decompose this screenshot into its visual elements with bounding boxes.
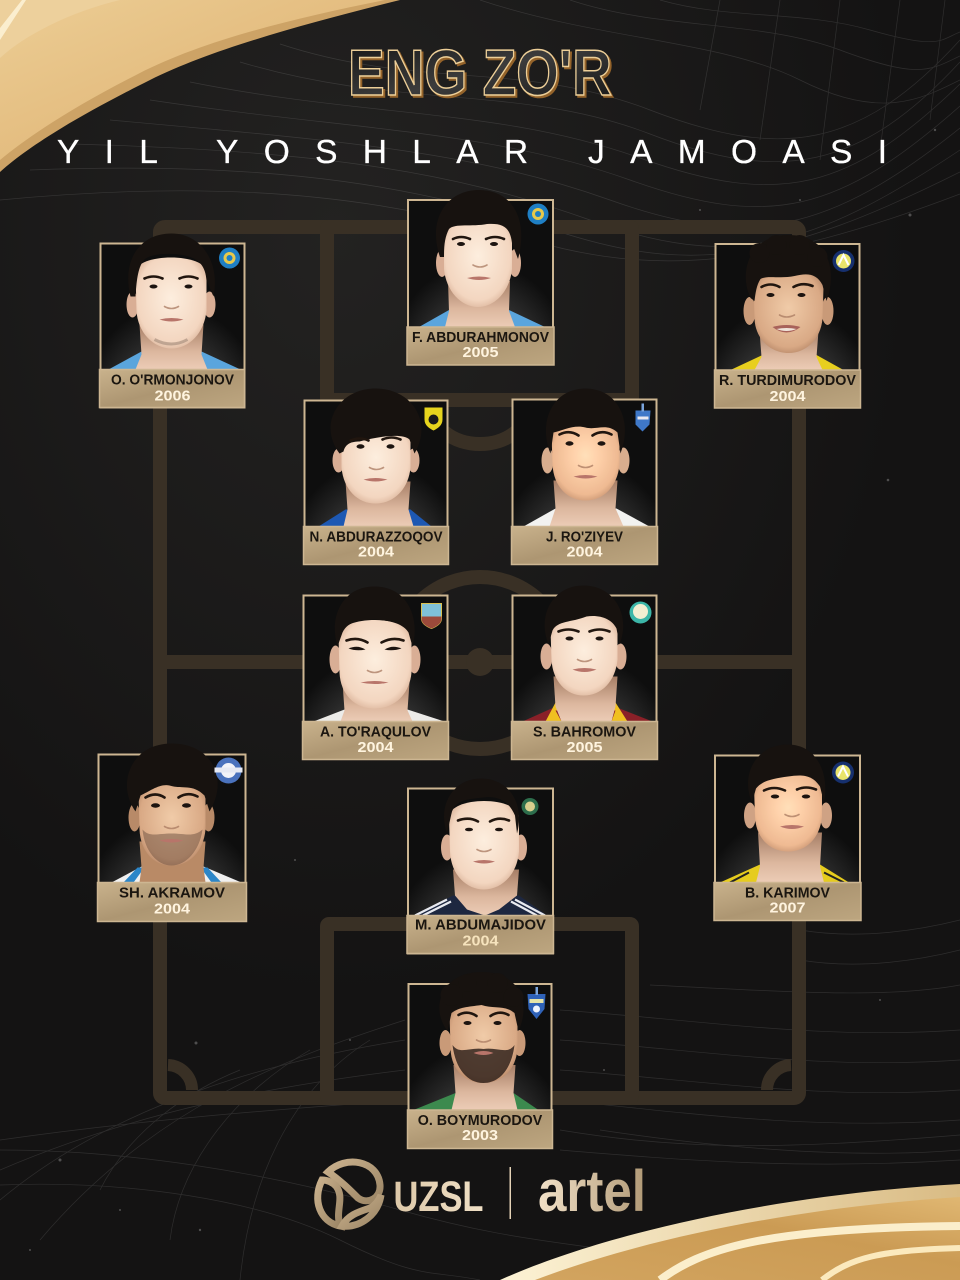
name and birth year: N. ABDURAZZOQOV [310,530,443,546]
club badge [522,798,538,815]
player card: SH. AKRAMOV [98,744,246,922]
player card: N. ABDURAZZOQOV [304,388,448,564]
name and birth year: 2004 [462,934,498,950]
club badge [219,248,240,268]
subtitle: YIL YOSHLAR JAMOASI: YIL YOSHLAR JAMOASI [57,134,887,171]
club badge [424,408,442,430]
icon: UZSL ball [318,1162,381,1226]
name and birth year: J. RO'ZIYEV [546,530,623,546]
name and birth year: F. ABDURAHMONOV [412,330,549,346]
name and birth year: 2004 [566,544,602,560]
player card: B. KARIMOV [714,744,861,920]
name and birth year: R. TURDIMURODOV [719,373,856,389]
name and birth year: 2003 [462,1128,498,1144]
portrait [524,388,650,526]
club badge [214,758,242,784]
portrait [419,190,545,327]
name and birth year: M. ABDUMAJIDOV [415,918,546,934]
player card: O. BOYMURODOV [408,972,552,1148]
UZSL logo [318,1162,484,1226]
name and birth year [512,526,658,564]
portrait [720,744,849,882]
portrait [318,388,432,526]
name and birth year: 2004 [358,740,394,756]
name and birth year: SH. AKRAMOV [119,886,225,902]
football pitch outline [160,227,799,1098]
name and birth year [100,370,244,408]
player card: S. BAHROMOV [512,586,658,760]
player card: F. ABDURAHMONOV [407,190,554,365]
club badge [832,762,854,784]
player card: O. O'RMONJONOV [100,234,244,408]
name and birth year: O. O'RMONJONOV [111,372,234,388]
name and birth year [408,1110,552,1148]
name and birth year [407,327,554,365]
name and birth year: 2006 [154,388,190,404]
player card: J. RO'ZIYEV [512,388,658,564]
player card: R. TURDIMURODOV [714,235,860,408]
name and birth year: 2007 [770,900,806,916]
name and birth year [302,722,448,760]
club badge [528,987,546,1019]
name and birth year [407,916,554,954]
portrait [415,778,547,916]
name and birth year: B. KARIMOV [745,886,830,902]
name and birth year [304,526,448,564]
name and birth year: 2005 [566,740,602,756]
club badge [832,250,854,272]
club badge [422,604,442,628]
artel logo: artel [538,1159,646,1224]
name and birth year [98,882,246,922]
gold swoosh bottom right [500,1184,960,1280]
name and birth year: S. BAHROMOV [533,724,636,740]
wordmark: UZSL: UZSL [394,1173,484,1221]
name and birth year [714,370,860,408]
gold swoosh top left [0,0,400,172]
name and birth year: 2004 [154,902,190,918]
club badge [528,204,548,224]
name and birth year [512,722,658,760]
name and birth year: A. TO'RAQULOV [320,724,431,740]
club badge [630,602,652,624]
portrait [112,744,242,882]
name and birth year: 2004 [358,544,394,560]
name and birth year: 2004 [770,389,806,405]
portrait [414,972,538,1110]
player card: A. TO'RAQULOV [302,586,448,760]
title: ENG ZO'R: ENG ZO'R [348,36,612,109]
club badge [636,404,650,432]
divider [510,1167,511,1219]
name and birth year: O. BOYMURODOV [418,1113,543,1129]
portrait [314,586,444,722]
portrait [108,234,240,370]
portrait [730,235,844,370]
name and birth year: 2005 [462,345,498,361]
portrait [522,586,652,722]
name and birth year [714,882,861,920]
player card: M. ABDUMAJIDOV [407,778,554,954]
